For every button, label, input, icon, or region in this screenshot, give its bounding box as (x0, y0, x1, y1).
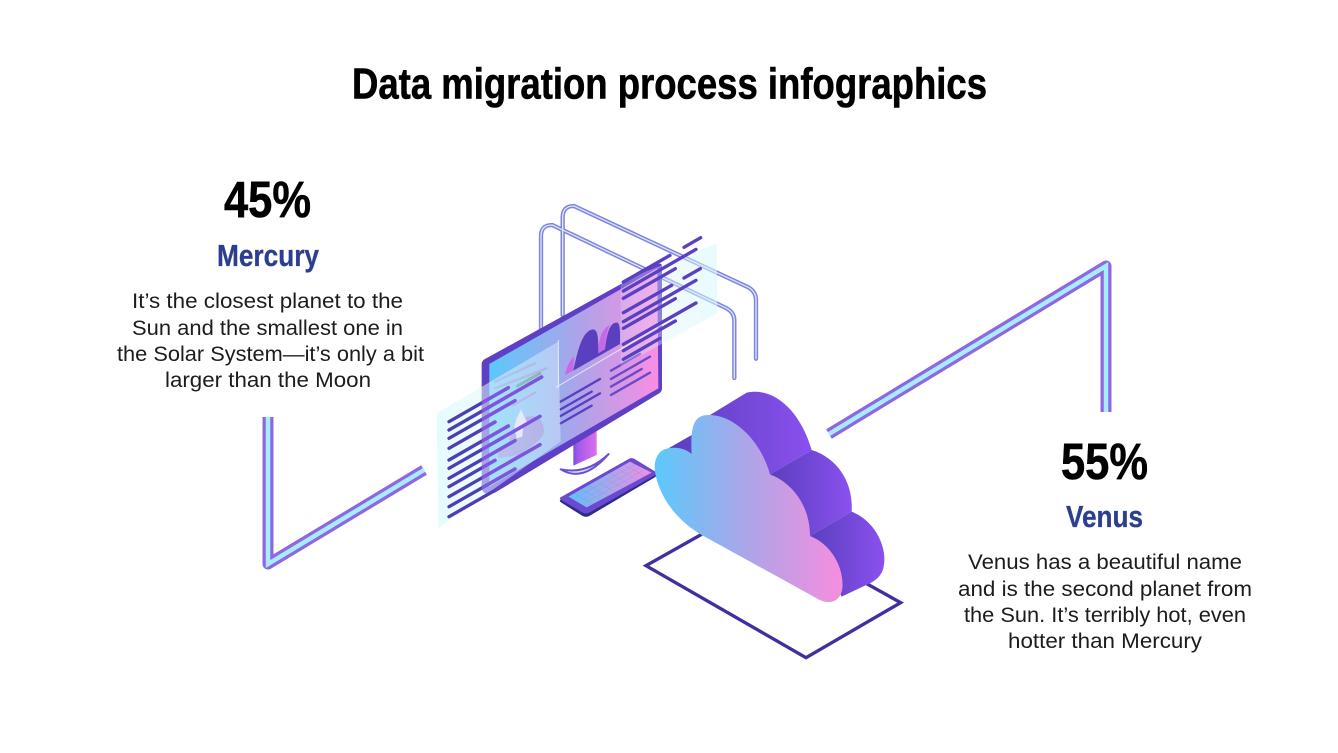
illustration: computer (437, 206, 756, 528)
monitor frame (482, 264, 662, 494)
keyboard (560, 458, 656, 517)
Mercury description: It’s the closest planet to the (132, 290, 403, 313)
cloud front face (655, 415, 843, 602)
data lines: left (449, 377, 542, 517)
illustration: cloud (646, 392, 901, 658)
cloud side: top lobe (668, 392, 812, 474)
screen text lines (495, 354, 650, 423)
title: Data migration process infographics (352, 60, 987, 108)
Mercury heading: Mercury (217, 238, 320, 273)
stand base arc (561, 454, 609, 474)
Venus description (958, 551, 1252, 653)
data lines: right (623, 238, 701, 359)
cloud side: lower lobe (810, 512, 884, 597)
Mercury percentage: 45% (224, 171, 311, 228)
screen cloud icon (498, 416, 544, 458)
Venus description: and is the second planet from (958, 578, 1252, 601)
monitor stand (573, 427, 597, 466)
cloud side: middle lobe (770, 450, 852, 536)
screen upload arrow (514, 409, 527, 438)
translucent panel: left (437, 342, 561, 528)
panel: Mercury (117, 171, 424, 392)
Venus description: Venus has a beautiful name (968, 551, 1242, 574)
connector line: left (268, 417, 424, 564)
Venus heading: Venus (1066, 499, 1143, 534)
Mercury description: the Solar System—it’s only a bit (117, 343, 424, 366)
screen chart (565, 323, 620, 375)
panel: Venus (958, 433, 1252, 653)
Venus description: hotter than Mercury (1008, 630, 1203, 653)
Venus description: the Sun. It’s terribly hot, even (964, 604, 1246, 627)
Mercury description: larger than the Moon (165, 369, 371, 392)
connector line: right (829, 266, 1106, 434)
data wires (541, 206, 756, 378)
base outline (646, 534, 901, 658)
translucent panel: right (621, 243, 717, 367)
panel highlight lines (556, 324, 663, 388)
Mercury description (117, 290, 424, 392)
Mercury description: Sun and the smallest one in (132, 317, 403, 340)
monitor screen (489, 268, 658, 487)
Venus percentage: 55% (1061, 433, 1148, 490)
data lines over monitor (482, 375, 544, 490)
